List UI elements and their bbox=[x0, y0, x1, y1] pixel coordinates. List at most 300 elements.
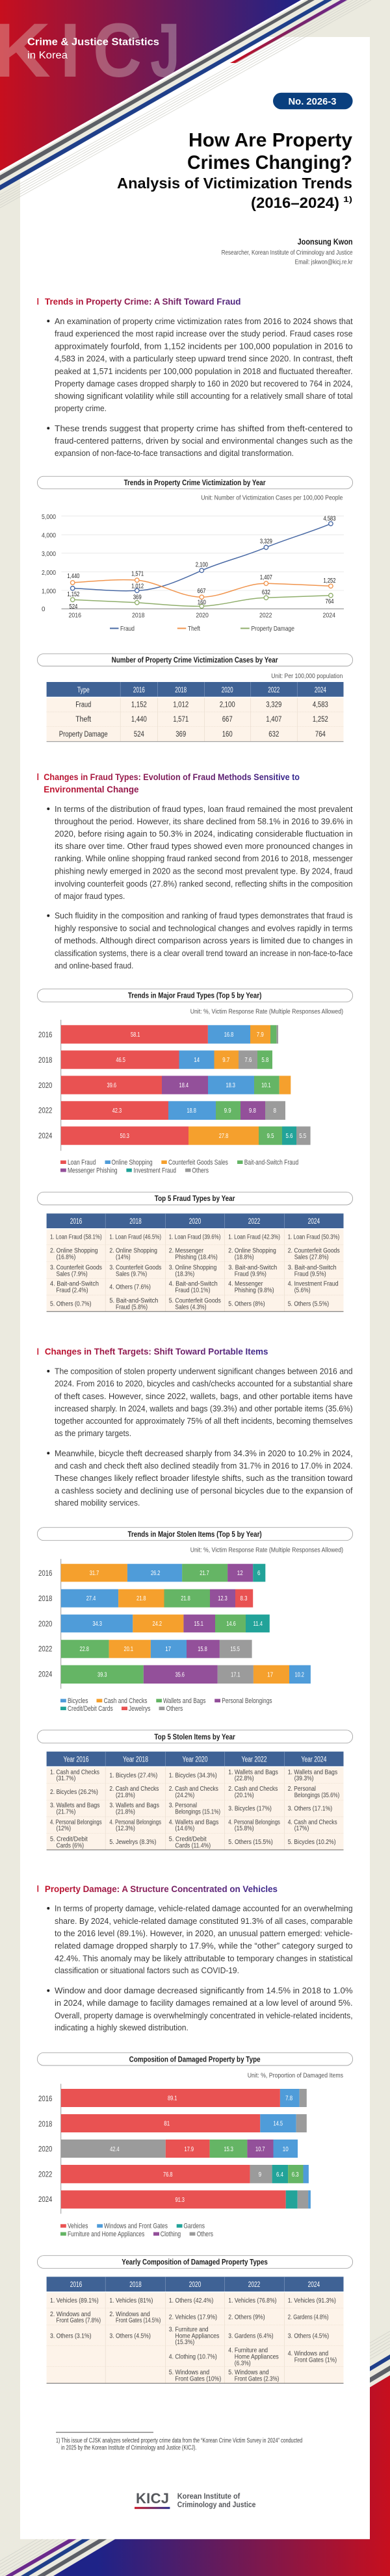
column: 2022: 2. Others (9%) bbox=[228, 2313, 265, 2321]
bar: 2024: 91.3 bbox=[175, 2196, 185, 2204]
column: 2020: 5. Credit/Debit bbox=[169, 1835, 207, 1843]
bar: 2016: 6 bbox=[257, 1569, 261, 1577]
logo: KICJ institute: Criminology and Justice bbox=[177, 2500, 256, 2509]
text block: fraud increase: showing significant volatility while still accounting for a relatively small share of total bbox=[55, 391, 353, 401]
bar: 2016 bbox=[38, 1025, 278, 1044]
bar: 2022: 6.4 bbox=[276, 2171, 283, 2178]
column: 2020 bbox=[169, 1771, 220, 1849]
text block: fraud increase: property crime. bbox=[55, 403, 107, 413]
column: 2022: 1. Loan Fraud (42.3%) bbox=[228, 1233, 280, 1241]
data labels: 160 bbox=[198, 598, 206, 606]
y axis labels: 1,000 bbox=[42, 587, 56, 595]
heading: changes in fraud types: Changes in Fraud Types: Evolution of Fraud Methods Sensitive to bbox=[44, 772, 300, 782]
column: 2022 bbox=[228, 2297, 279, 2382]
bar: 2018: 8.3 bbox=[240, 1595, 248, 1602]
text block: stolen property composition: as the primary targets. bbox=[55, 1428, 131, 1438]
bar: 2020: 17.9 bbox=[185, 2145, 194, 2153]
data labels bbox=[67, 514, 336, 611]
bar: 2018: 14 bbox=[194, 1056, 200, 1064]
column: 2022: 4. Personal Belongings bbox=[228, 1819, 280, 1826]
column: 2022: Front Gates (2.3%) bbox=[235, 2375, 279, 2382]
column: 2016: 4. Bait-and-Switch bbox=[50, 1280, 99, 1288]
legend: Windows and Front Gates bbox=[104, 2223, 168, 2230]
header row: 2020 bbox=[222, 687, 233, 694]
bar: 2020: 10.7 bbox=[255, 2145, 265, 2153]
bar: 2018 bbox=[38, 1589, 253, 1608]
column: 2016: 5. Credit/Debit bbox=[50, 1835, 88, 1843]
bar: 2022: 18.8 bbox=[187, 1107, 196, 1115]
series: fraud bbox=[70, 522, 333, 592]
text block: fraud type distribution: phishing newly emerged in 2020 as the second most prevalent type. By 2024, fraud bbox=[55, 866, 353, 876]
bar: 2016: 7.9 bbox=[257, 1031, 264, 1039]
row: theft: 1,407 bbox=[266, 716, 281, 724]
column: 2018 bbox=[109, 1771, 161, 1846]
column: 2020: Fraud (10.1%) bbox=[175, 1287, 210, 1294]
heading: changes in fraud types: Environmental Change bbox=[44, 785, 139, 794]
header row: 2018 bbox=[129, 1218, 142, 1226]
column: 2020: 3. Online Shopping bbox=[169, 1263, 216, 1271]
y axis labels: 5,000 bbox=[42, 513, 56, 521]
column: 2024: 1. Wallets and Bags bbox=[288, 1768, 337, 1776]
legend: Gardens bbox=[183, 2223, 205, 2230]
series: property damage bbox=[70, 594, 333, 608]
text block: fraud type distribution: of major fraud types. bbox=[55, 891, 125, 901]
column: 2022: 4. Messenger bbox=[228, 1280, 263, 1288]
logo: KICJ institute bbox=[135, 2490, 256, 2509]
text block: stolen property composition: 2024. From 2016 to 2020, bicycles and cash/checks accounted for a substantial share bbox=[55, 1378, 353, 1389]
watermark: KICJ letters: C bbox=[93, 8, 142, 94]
title: Analysis of Victimization Trends bbox=[117, 175, 352, 192]
bar: 2016 bbox=[38, 1564, 265, 1582]
text block: fraud increase: 4,583 in 2024, with a particularly steep upward trend since 2020. In contrast, theft bbox=[55, 353, 353, 364]
text block: fraud type distribution: its share over time. Other fraud types showed even more pronounced changes in bbox=[55, 841, 353, 851]
text block: fraud type distribution: throughout the period. However, its share declined from 58.1% in 2016 to 39.6% in bbox=[55, 816, 353, 826]
legend: Clothing bbox=[161, 2230, 181, 2238]
bar: 2020: 18.3 bbox=[226, 1081, 235, 1089]
text block: stolen property composition: of theft cases. However, since 2022, wallets, bags, and other portable items have bbox=[55, 1391, 353, 1401]
table: victimization cases by year bbox=[47, 672, 343, 742]
text block: stolen property composition bbox=[47, 1367, 353, 1438]
text block: fluidity of fraud types: highly responsive to social and technological changes and evolves rapidly in terms bbox=[55, 924, 353, 933]
bar: 2022: 2022 bbox=[38, 1646, 52, 1654]
bar: 2022: 2022 bbox=[38, 2171, 52, 2178]
y axis labels: 4,000 bbox=[42, 531, 56, 539]
title bbox=[117, 130, 352, 211]
x axis labels: 2016 bbox=[68, 612, 81, 620]
bar: 2016: 12 bbox=[237, 1569, 243, 1577]
data labels: 1,252 bbox=[324, 577, 336, 585]
data labels: 764 bbox=[325, 598, 334, 605]
column: 2016: 2. Online Shopping bbox=[50, 1247, 98, 1255]
column: 2020: 2. Vehicles (17.9%) bbox=[169, 2313, 217, 2321]
chart title: top 5 fraud types: Top 5 Fraud Types by Year bbox=[155, 1195, 235, 1203]
bar: 2020: 2020 bbox=[38, 2146, 52, 2154]
column: 2024: Front Gates (1%) bbox=[294, 2356, 337, 2364]
bar: 2022: 15.5 bbox=[230, 1645, 240, 1653]
bar: 2024: 17.1 bbox=[231, 1671, 240, 1678]
chart title: trends in property crime victimization: Trends in Property Crime Victimization by Year bbox=[124, 479, 266, 487]
column: 2024: 2. Personal bbox=[288, 1785, 316, 1793]
bar: 2020: 11.4 bbox=[254, 1620, 263, 1628]
bar: 2020: 15.1 bbox=[194, 1620, 203, 1628]
chart title: yearly composition of damaged property bbox=[37, 2256, 353, 2268]
column: 2020: 4. Bait-and-Switch bbox=[169, 1280, 218, 1288]
y axis labels: 0 bbox=[42, 605, 46, 613]
chart title: major fraud types: Trends in Major Fraud Types (Top 5 by Year) bbox=[128, 992, 261, 1000]
bar: 2024: 50.3 bbox=[120, 1132, 129, 1140]
column: 2018: 2. Windows and bbox=[109, 2310, 150, 2318]
text block: fraud type distribution: involving counterfeit goods (27.8%) ranked second, reflecting shifts in the composition bbox=[55, 879, 353, 889]
legend bbox=[60, 2223, 213, 2238]
row: theft: 1,571 bbox=[173, 716, 188, 724]
title: How Are Property bbox=[188, 130, 352, 151]
issue number badge bbox=[273, 93, 353, 109]
column: 2016: (12%) bbox=[56, 1825, 71, 1832]
column: 2024: 3. Others (4.5%) bbox=[288, 2332, 329, 2340]
bar: 2016: 2016 bbox=[38, 2095, 52, 2103]
table: yearly damaged property bbox=[47, 2277, 343, 2383]
bar: 2024: 2024 bbox=[38, 1671, 53, 1678]
row: property damage: 524 bbox=[134, 731, 144, 739]
column: 2016: Cards (6%) bbox=[56, 1841, 84, 1849]
chart title: top 5 stolen items bbox=[37, 1730, 353, 1743]
column: 2022: 3. Bait-and-Switch bbox=[228, 1263, 277, 1271]
legend: Jewelrys bbox=[129, 1705, 151, 1713]
column: 2024: Fraud (9.5%) bbox=[294, 1270, 326, 1278]
bar: 2020 bbox=[38, 2140, 298, 2158]
stacked bar chart: fraud types: Unit: %, Victim Response Rate (Multiple Responses Allowed) bbox=[190, 1008, 343, 1016]
table: victimization cases by year: Unit: Per 100,000 population bbox=[271, 672, 343, 680]
column: 2018: (14%) bbox=[116, 1253, 131, 1261]
legend: Others bbox=[197, 2230, 213, 2238]
data labels: 3,329 bbox=[260, 538, 272, 546]
column: 2022: (15.8%) bbox=[235, 1825, 254, 1832]
heading: property damage: Property Damage: A Structure Concentrated on Vehicles bbox=[45, 1884, 278, 1894]
column: 2024: 3. Bait-and-Switch bbox=[288, 1263, 337, 1271]
column: 2022: Phishing (9.8%) bbox=[235, 1287, 274, 1294]
title: 1) bbox=[343, 195, 352, 204]
column: 2020: 1. Loan Fraud (39.6%) bbox=[169, 1233, 220, 1241]
bar: 2022: 17 bbox=[165, 1645, 171, 1653]
logo: KICJ institute: Korean Institute of bbox=[177, 2492, 240, 2501]
column: 2024: 1. Vehicles (91.3%) bbox=[288, 2297, 336, 2305]
bar: 2020: 10 bbox=[283, 2145, 289, 2153]
bar: 2024: 27.8 bbox=[219, 1132, 228, 1140]
bar: 2016: 2016 bbox=[38, 1570, 52, 1578]
column: 2020 bbox=[169, 1233, 221, 1311]
header row: 2022 bbox=[248, 2281, 260, 2289]
column: 2024: 1. Loan Fraud (50.3%) bbox=[288, 1233, 339, 1241]
author: Email: jskwon@kicj.re.kr bbox=[295, 259, 353, 266]
bar: 2020: 24.2 bbox=[153, 1620, 162, 1628]
column: 2016: 2. Bicycles (26.2%) bbox=[50, 1788, 98, 1796]
text block: vehicle-related damage: 42.4%. This anomaly may be likely attributable to temporary changes in statistical bbox=[55, 1954, 353, 1963]
bar: 2020: 39.6 bbox=[107, 1081, 116, 1089]
x axis labels: 2020 bbox=[196, 612, 209, 620]
row: fraud: 1,152 bbox=[131, 701, 147, 709]
legend bbox=[60, 1697, 272, 1713]
chart title: yearly composition of damaged property: Yearly Composition of Damaged Property Types bbox=[122, 2258, 268, 2266]
bar: 2024: 9.5 bbox=[266, 1132, 274, 1140]
bar: 2024: 5.6 bbox=[286, 1132, 293, 1140]
watermark: KICJ letters: J bbox=[150, 8, 180, 94]
y axis labels bbox=[42, 513, 56, 613]
text block: bicycle and cash decline bbox=[47, 1448, 353, 1508]
decoration: bottom gradient band bbox=[0, 2331, 390, 2576]
legend: Investment Fraud bbox=[134, 1167, 176, 1174]
column: 2022: 1. Vehicles (76.8%) bbox=[228, 2297, 277, 2305]
row: theft: 667 bbox=[222, 716, 233, 724]
column: 2022: Home Appliances bbox=[235, 2353, 279, 2361]
text block: fraud type distribution: 2020, before rising again to 50.3% in 2024, indicating considerable fluctuation in bbox=[55, 829, 353, 839]
y axis labels: 2,000 bbox=[42, 569, 56, 577]
row: fraud: Fraud bbox=[75, 701, 91, 709]
column: 2024 bbox=[288, 2297, 337, 2364]
column: 2018 bbox=[109, 1233, 161, 1311]
column: 2020: 2. Cash and Checks bbox=[169, 1785, 218, 1793]
bar: 2018: 2018 bbox=[38, 1595, 52, 1603]
bar: 2022: 2022 bbox=[38, 1107, 52, 1115]
column: 2020: 1. Bicycles (34.3%) bbox=[169, 1771, 217, 1779]
column: 2024: 5. Bicycles (10.2%) bbox=[288, 1838, 336, 1846]
data labels: 1,152 bbox=[67, 590, 80, 598]
column: 2022 bbox=[228, 1768, 280, 1846]
column: 2018: Fraud (5.8%) bbox=[116, 1303, 148, 1311]
column: 2022: 2. Cash and Checks bbox=[228, 1785, 278, 1793]
column: 2020: (24.2%) bbox=[175, 1791, 194, 1799]
header row: Year 2018 bbox=[123, 1756, 148, 1763]
column: 2020: 5. Windows and bbox=[169, 2368, 209, 2376]
column: 2024: 4. Windows and bbox=[288, 2350, 328, 2358]
data labels: 1,440 bbox=[67, 572, 80, 580]
text block: fluidity of fraud types: and online-based fraud. bbox=[55, 961, 133, 970]
heading: changes in theft targets: Changes in Theft Targets: Shift Toward Portable Items bbox=[45, 1347, 268, 1357]
column: 2016 bbox=[50, 1233, 102, 1307]
text block: vehicle-related damage: to the 2016 level (89.1%). However, in 2020, an unusual pattern emerged: vehicle- bbox=[55, 1928, 353, 1938]
column: 2024: 4. Investment Fraud bbox=[288, 1280, 339, 1288]
bar: 2022 bbox=[38, 2165, 309, 2183]
footnote: in 2025 by the Korean Institute of Criminology and Justice (KICJ). bbox=[61, 2445, 196, 2452]
row: property damage: 632 bbox=[268, 731, 279, 739]
text block: window and door damage bbox=[47, 1986, 353, 2032]
header row: 2016 bbox=[133, 687, 145, 694]
line chart: property crime victimization: Unit: Number of Victimization Cases per 100,000 People bbox=[201, 494, 343, 502]
data labels: 4,583 bbox=[324, 514, 336, 522]
decoration: top gradient triangle with stripes bbox=[0, 0, 371, 208]
author bbox=[222, 236, 353, 266]
bar: 2022: 42.3 bbox=[112, 1107, 122, 1115]
row: theft: 1,252 bbox=[313, 716, 328, 724]
column: 2020 bbox=[169, 2297, 221, 2382]
column: 2020: 5. Counterfeit Goods bbox=[169, 1296, 221, 1304]
text block: fraud type distribution bbox=[47, 804, 353, 901]
bar: 2020: 15.3 bbox=[224, 2145, 233, 2153]
column: 2022: (20.1%) bbox=[235, 1791, 254, 1799]
column: 2016: Front Gates (7.8%) bbox=[56, 2316, 101, 2324]
header row: 2022 bbox=[268, 687, 280, 694]
text block: vehicle-related damage: classification or situational factors such as COVID-19. bbox=[55, 1965, 239, 1975]
bar: 2024 bbox=[38, 1126, 311, 1145]
text block: bicycle and cash decline: shared mobility services. bbox=[55, 1498, 140, 1508]
bar: 2020: 2020 bbox=[38, 1082, 52, 1090]
column: 2018: 1. Bicycles (27.4%) bbox=[109, 1771, 157, 1779]
column: 2022: 2. Online Shopping bbox=[228, 1247, 276, 1255]
bar: 2024: 10.2 bbox=[294, 1671, 304, 1678]
bar: 2016: 2016 bbox=[38, 1031, 52, 1039]
column: 2024 bbox=[288, 1233, 340, 1307]
column: 2020: Cards (11.4%) bbox=[175, 1841, 211, 1849]
column: 2018: 2. Cash and Checks bbox=[109, 1785, 159, 1793]
text block: window and door damage: Window and door damage decreased significantly from 14.5% in 2018 to 1.0% bbox=[55, 1986, 353, 1995]
table: top 5 fraud types bbox=[47, 1213, 343, 1311]
column: 2024 bbox=[288, 1768, 339, 1846]
chart title: trends in property crime victimization bbox=[37, 476, 353, 489]
x axis labels: 2022 bbox=[259, 612, 272, 620]
bar: 2022: 20.1 bbox=[124, 1645, 133, 1653]
bar: 2022: 9.8 bbox=[249, 1107, 256, 1115]
column: 2016: 2. Windows and bbox=[50, 2310, 91, 2318]
bar: 2020: 18.4 bbox=[179, 1081, 188, 1089]
legend bbox=[60, 1159, 298, 1174]
bar: 2022 bbox=[38, 1640, 252, 1658]
bar: 2018: 14.5 bbox=[274, 2120, 283, 2128]
bar: 2018: 2018 bbox=[38, 1057, 52, 1065]
bar: 2016 bbox=[38, 2089, 307, 2107]
chart title: major stolen items bbox=[37, 1528, 353, 1541]
header row bbox=[64, 1756, 327, 1763]
legend: Online Shopping bbox=[111, 1159, 153, 1167]
legend: Others bbox=[166, 1705, 183, 1713]
text block: vehicle-related damage: In terms of property damage, vehicle-related damage accounted for an overwhelming bbox=[55, 1903, 353, 1913]
column: 2016: Fraud (2.4%) bbox=[56, 1287, 88, 1294]
series: theft bbox=[70, 578, 333, 599]
row: fraud: 4,583 bbox=[313, 701, 328, 709]
bar: 2024: 39.3 bbox=[98, 1671, 107, 1678]
chart title: composition of damaged property: Composition of Damaged Property by Type bbox=[129, 2056, 261, 2064]
column: 2022: Fraud (9.9%) bbox=[235, 1270, 266, 1278]
column: 2020: Sales (4.3%) bbox=[175, 1303, 207, 1311]
text block: stolen property composition: increased sharply. In 2024, wallets and bags (39.3%) and other portable items (35.6%) bbox=[55, 1404, 353, 1413]
column: 2020: (14.6%) bbox=[175, 1825, 194, 1832]
column: 2020: 3. Furniture and bbox=[169, 2326, 209, 2334]
legend: Others bbox=[192, 1167, 209, 1174]
bar: 2024: 35.6 bbox=[175, 1671, 185, 1678]
bar: 2018: 27.4 bbox=[86, 1595, 96, 1602]
column: 2020: Phishing (18.4%) bbox=[175, 1253, 218, 1261]
column: 2018: (12.3%) bbox=[116, 1825, 135, 1832]
bar: 2020: 14.6 bbox=[226, 1620, 236, 1628]
header row: Year 2016 bbox=[64, 1756, 88, 1763]
text block: shift to fraud-centered: expansion of non-face-to-face transactions and digital transformation. bbox=[55, 448, 294, 458]
legend: Bait-and-Switch Fraud bbox=[244, 1159, 298, 1167]
x axis labels: 2024 bbox=[322, 612, 335, 620]
legend: Property Damage bbox=[251, 625, 294, 633]
column: 2018: 4. Others (7.6%) bbox=[109, 1283, 151, 1291]
column: 2018: Sales (9.7%) bbox=[116, 1270, 147, 1278]
text block: shift to fraud-centered: These trends suggest that property crime has shifted from theft-centered to bbox=[55, 423, 353, 433]
x axis labels: 2018 bbox=[132, 612, 145, 620]
title: Crimes Changing? bbox=[187, 152, 352, 173]
column: 2022: 1. Wallets and Bags bbox=[228, 1768, 278, 1776]
column: 2020: Belongings (15.1%) bbox=[175, 1808, 220, 1816]
header row: 2018 bbox=[129, 2281, 142, 2289]
text block: shift to fraud-centered: fraud-centered patterns, driven by social and environmental changes such as the bbox=[55, 436, 353, 446]
header row: 2016 bbox=[70, 1218, 82, 1226]
bar: 2018 bbox=[38, 2114, 307, 2132]
text block: bicycle and cash decline: Meanwhile, bicycle theft decreased sharply from 34.3% in 2020 to 10.2% in 2024, bbox=[55, 1448, 353, 1458]
column: 2024: 2. Gardens (4.8%) bbox=[288, 2313, 329, 2321]
column: 2018: 1. Loan Fraud (46.5%) bbox=[109, 1233, 161, 1241]
row: property damage: 160 bbox=[222, 731, 233, 739]
column: 2022: (22.8%) bbox=[235, 1774, 254, 1782]
data labels: 524 bbox=[69, 603, 78, 611]
bar: 2022: 8 bbox=[274, 1107, 276, 1115]
column: 2016 bbox=[50, 1768, 102, 1849]
text block: window and door damage: Overall, property damage is overwhelmingly concentrated in vehicle-related incidents, bbox=[55, 2011, 353, 2020]
header row: Year 2020 bbox=[182, 1756, 208, 1763]
header row: 2018 bbox=[175, 687, 187, 694]
column: 2016: 5. Others (0.7%) bbox=[50, 1300, 91, 1307]
row: property damage: Property Damage bbox=[59, 731, 108, 739]
column: 2018: 2. Online Shopping bbox=[109, 1247, 157, 1255]
text block: fraud increase bbox=[47, 316, 353, 413]
bar: 2016: 16.8 bbox=[224, 1031, 233, 1039]
table: top 5 stolen items bbox=[47, 1752, 343, 1850]
y axis labels: 3,000 bbox=[42, 550, 56, 558]
legend: Loan Fraud bbox=[68, 1159, 96, 1167]
author: Researcher, Korean Institute of Criminology and Justice bbox=[222, 249, 353, 257]
bar: 2022: 76.8 bbox=[163, 2171, 173, 2178]
row: theft: Theft bbox=[75, 716, 92, 724]
x axis labels bbox=[68, 612, 335, 620]
column: 2018: 3. Wallets and Bags bbox=[109, 1802, 159, 1810]
column: 2024: 3. Others (17.1%) bbox=[288, 1805, 332, 1813]
bar: 2016: 7.8 bbox=[285, 2094, 292, 2102]
bar: 2018: 2018 bbox=[38, 2121, 52, 2128]
footnote: 1) This issue of CJSK analyzes selected property crime data from the “Korean Crime Victim Survey in 2024” conducted bbox=[56, 2438, 302, 2445]
text block: bicycle and cash decline: a cashless society and declining use of personal bicycles due to the expansion of bbox=[55, 1486, 353, 1495]
legend: Credit/Debit Cards bbox=[68, 1705, 113, 1713]
chart title: composition of damaged property bbox=[37, 2052, 353, 2065]
bar: 2022: 6.3 bbox=[292, 2171, 299, 2178]
bar: 2018: 12.3 bbox=[218, 1595, 228, 1602]
bar: 2022: 9.9 bbox=[224, 1107, 231, 1115]
column: 2018 bbox=[109, 2297, 161, 2340]
text block: window and door damage: indicating a highly skewed distribution. bbox=[55, 2023, 188, 2032]
row: property damage bbox=[59, 731, 326, 739]
column: 2018: 3. Counterfeit Goods bbox=[109, 1263, 161, 1271]
legend: Cash and Checks bbox=[104, 1697, 148, 1705]
column: 2024: 4. Cash and Checks bbox=[288, 1819, 337, 1826]
text block: fraud type distribution: ranking. While online shopping fraud ranked second from 2016 to 2018, messenger bbox=[55, 853, 353, 863]
header row: 2022 bbox=[248, 1218, 260, 1226]
legend: Personal Belongings bbox=[222, 1697, 272, 1705]
column: 2020: 3. Personal bbox=[169, 1802, 197, 1810]
bar: 2016: 21.7 bbox=[200, 1569, 209, 1577]
bar: 2020: 10.1 bbox=[261, 1081, 271, 1089]
footnote bbox=[56, 2432, 302, 2452]
bar: 2018: 21.8 bbox=[181, 1595, 190, 1602]
bar: 2022 bbox=[38, 1101, 285, 1120]
chart title: number of property crime cases bbox=[37, 654, 353, 666]
header row: 2024 bbox=[308, 2281, 320, 2289]
row: fraud: 1,012 bbox=[173, 701, 188, 709]
bar: 2024: 2024 bbox=[38, 1133, 53, 1141]
chart title: major stolen items: Trends in Major Stolen Items (Top 5 by Year) bbox=[127, 1531, 262, 1539]
bar: 2024: 17 bbox=[267, 1671, 273, 1678]
legend: Wallets and Bags bbox=[163, 1697, 206, 1705]
column: 2022: (6.3%) bbox=[235, 2360, 251, 2368]
